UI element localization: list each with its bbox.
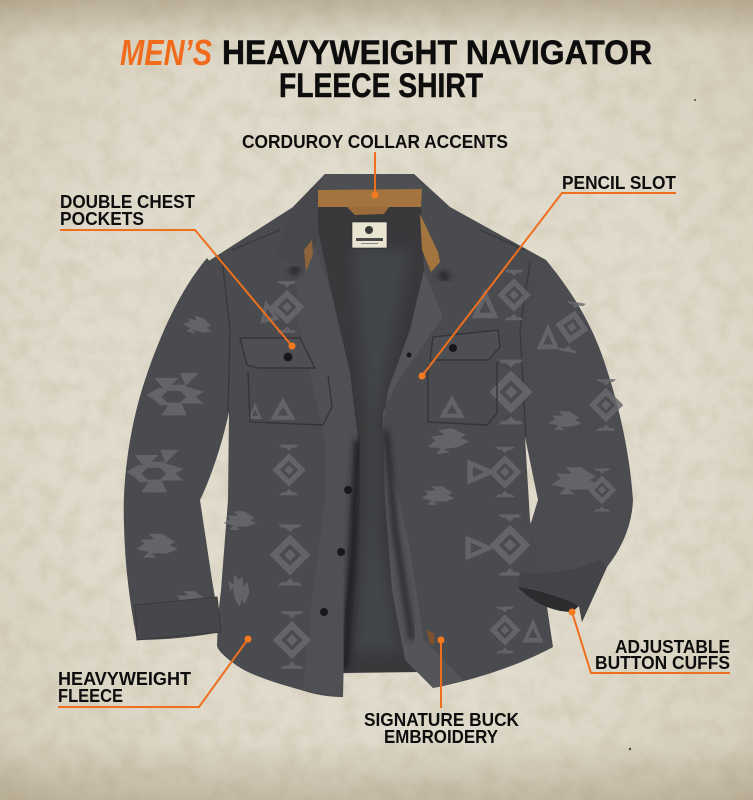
lining centre highlight [352, 250, 410, 650]
buttons [284, 344, 457, 616]
jacket body [207, 174, 553, 697]
callout: signature buck embroidery [364, 636, 519, 747]
collar: right leaf [402, 174, 471, 257]
right sleeve [510, 260, 633, 622]
left cuff band [135, 597, 221, 640]
jacket photo illustration [124, 174, 633, 697]
collar: left leaf [276, 174, 330, 268]
neck tag [352, 222, 387, 248]
callout: double chest pockets: POCKETS [60, 209, 144, 229]
right pocket [428, 330, 500, 425]
callout: pencil slot: PENCIL SLOT [562, 173, 676, 193]
left sleeve [124, 258, 240, 640]
callout: adjustable button cuffs: BUTTON CUFFS [595, 653, 730, 673]
interior fleece lining [313, 207, 443, 673]
title [120, 32, 652, 105]
callout: corduroy collar accents: CORDUROY COLLAR ACCENTS [242, 132, 508, 152]
side shadows [345, 440, 358, 670]
collar: back [318, 174, 424, 190]
callout: double chest pockets: DOUBLE CHEST [60, 192, 195, 212]
corduroy loop [347, 207, 389, 215]
corduroy facing [420, 214, 440, 272]
aztec jacquard pattern [126, 270, 623, 669]
title: FLEECE SHIRT [279, 67, 483, 105]
callout: heavyweight fleece [58, 636, 252, 707]
callout: signature buck embroidery: SIGNATURE BUCK [364, 710, 519, 730]
callout: adjustable button cuffs [568, 608, 730, 673]
buck embroidery [427, 630, 435, 645]
callout: double chest pockets [60, 192, 296, 350]
left placket [297, 240, 358, 697]
right placket [383, 270, 463, 688]
callout: adjustable button cuffs: ADJUSTABLE [615, 637, 730, 657]
right cuff [518, 560, 607, 622]
left corduroy facing [304, 240, 313, 272]
callout: pencil slot [418, 173, 676, 380]
shoulder seams [222, 230, 530, 437]
callout: corduroy collar accents [242, 132, 508, 198]
callout: signature buck embroidery: EMBROIDERY [384, 727, 498, 747]
title: HEAVYWEIGHT NAVIGATOR [222, 34, 652, 72]
title: MEN’S [120, 32, 212, 73]
callout: heavyweight fleece: HEAVYWEIGHT [58, 669, 191, 689]
callout: heavyweight fleece: FLEECE [58, 686, 123, 706]
corduroy collar band [318, 189, 422, 207]
left pocket [240, 338, 332, 425]
